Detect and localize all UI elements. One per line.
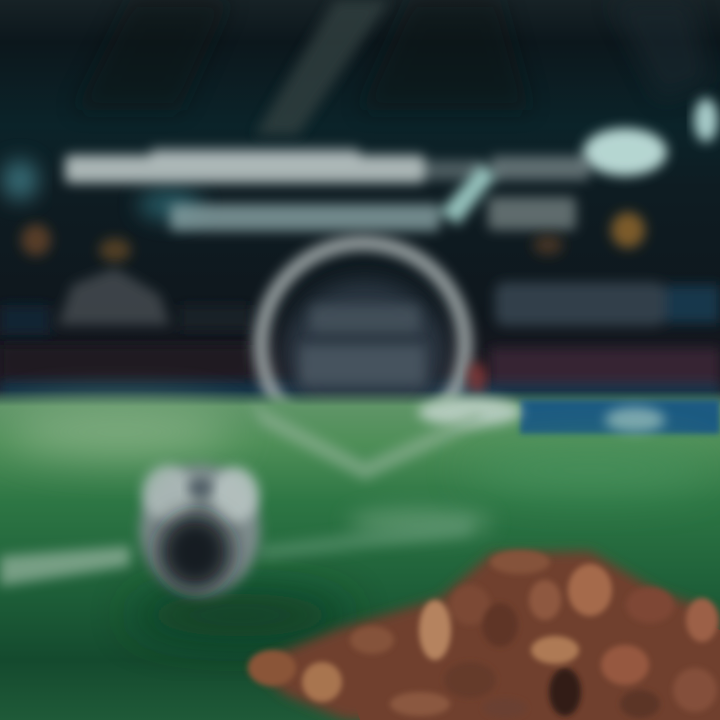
stand blocks xyxy=(0,268,720,335)
football xyxy=(140,464,260,596)
crowd band xyxy=(0,345,720,400)
pitch xyxy=(0,390,720,720)
headline, blurred: line one xyxy=(65,148,590,183)
stadium lights xyxy=(2,98,718,220)
pile of copper coins xyxy=(248,550,720,720)
background: stands and roof xyxy=(0,0,720,420)
warm stand lights xyxy=(21,212,645,262)
headline, blurred: line two xyxy=(170,165,576,231)
roof ribs xyxy=(75,0,710,135)
circular badge xyxy=(261,243,486,447)
